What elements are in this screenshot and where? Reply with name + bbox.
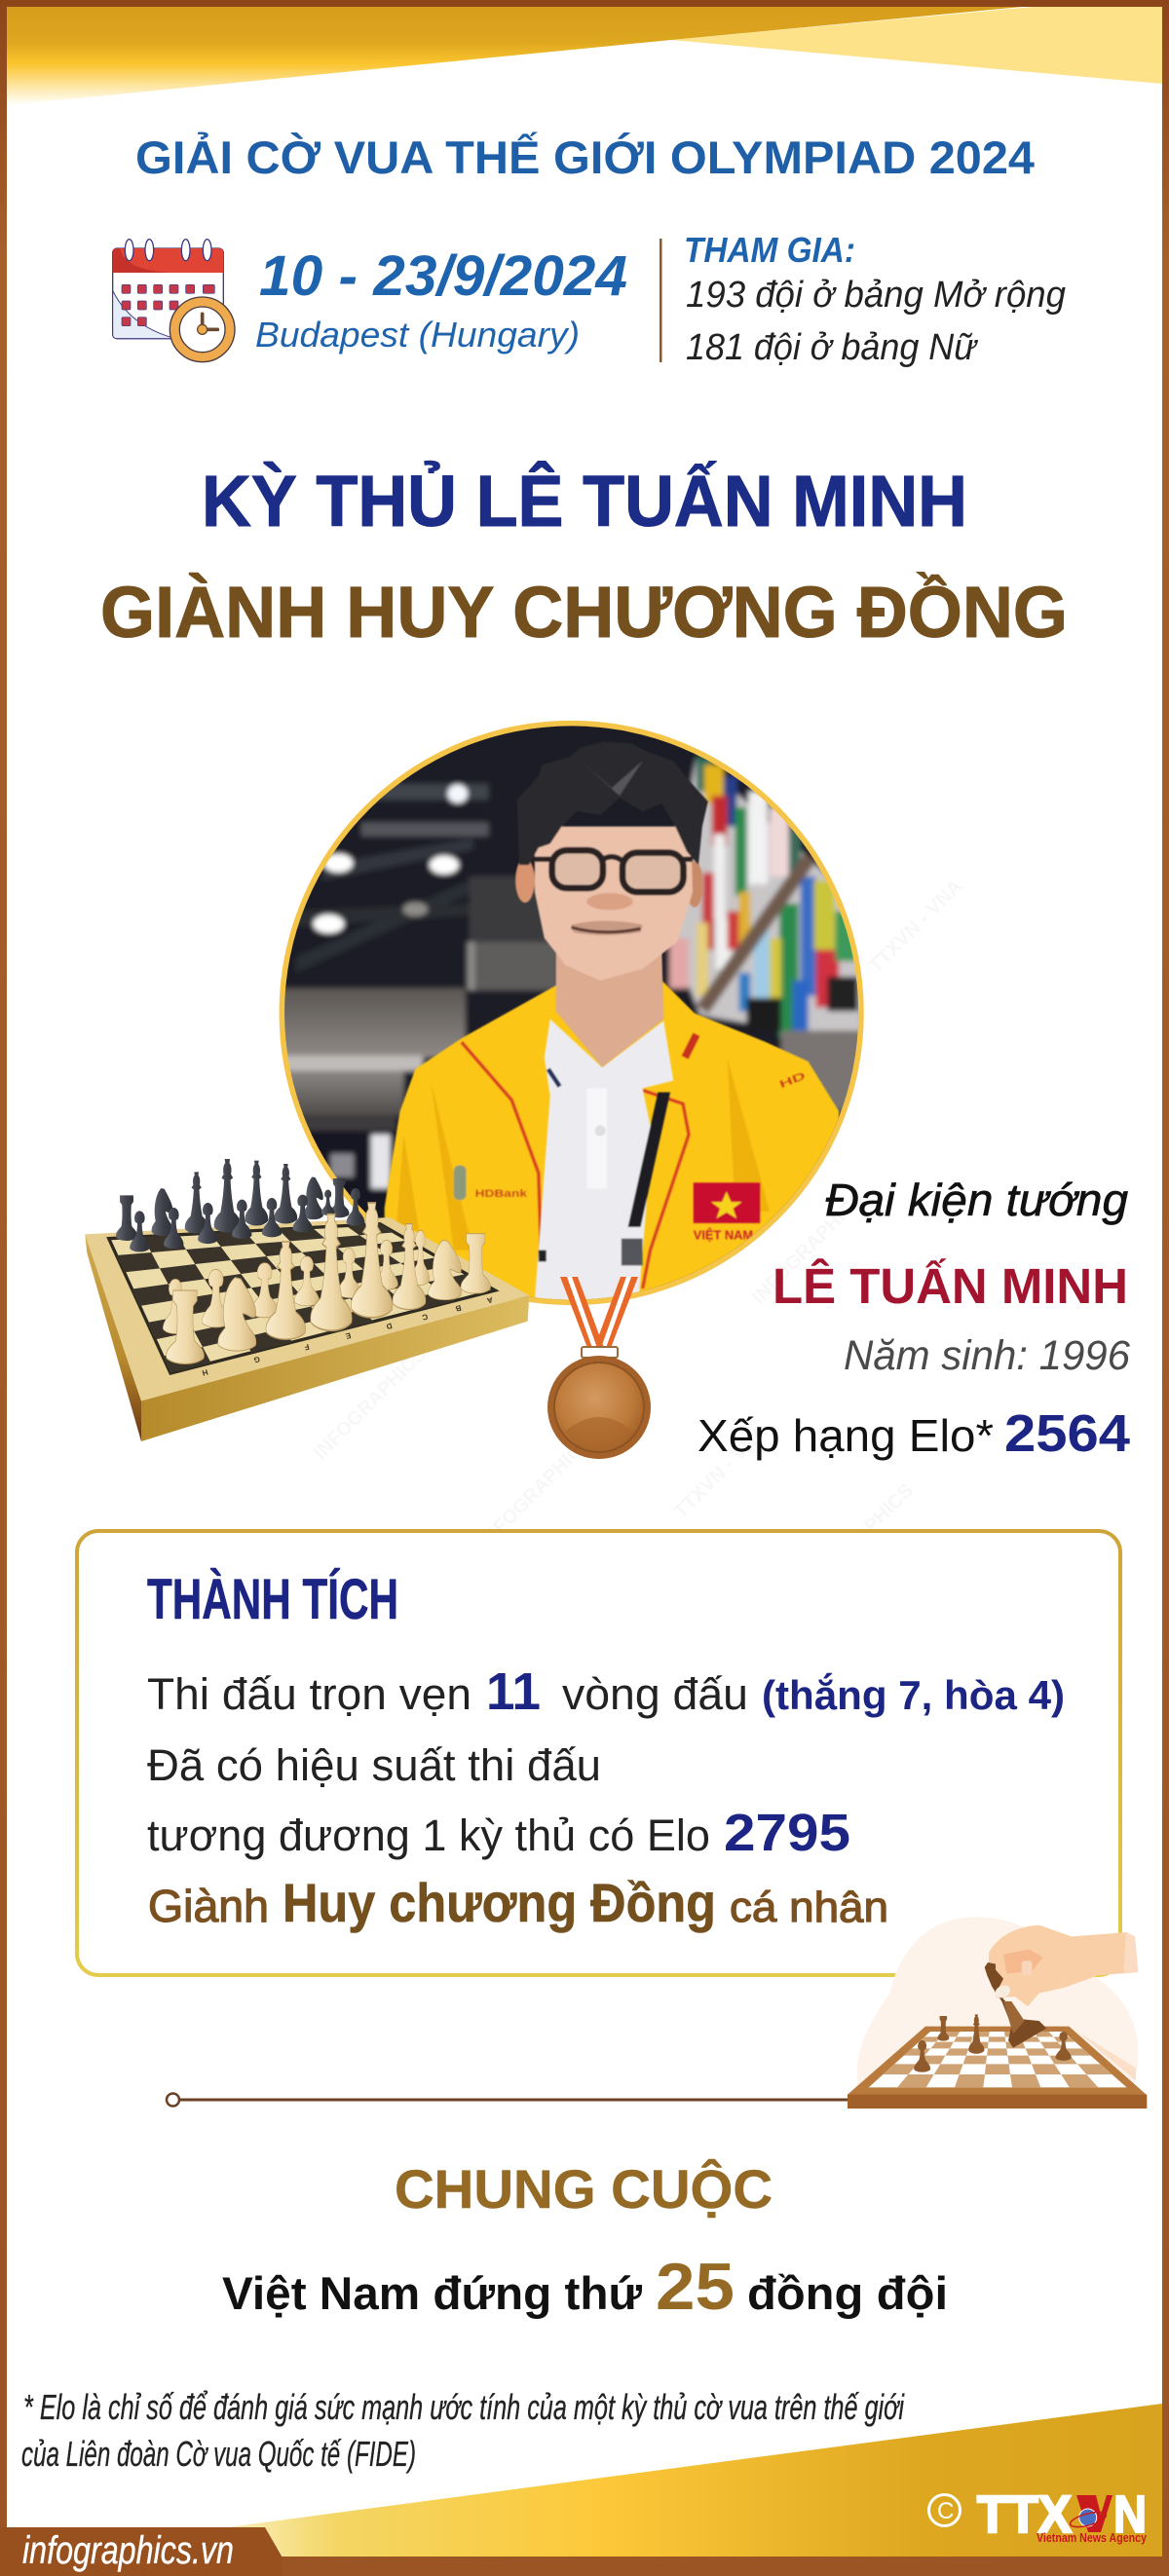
- chess board illustration: A: [486, 1295, 494, 1305]
- divider: [660, 239, 662, 362]
- achievement line 4: Giành: [148, 1881, 269, 1931]
- women section teams: 181 đội ở bảng Nữ: [686, 327, 979, 368]
- chess board illustration: D: [385, 1321, 393, 1331]
- achievement line 1: 11: [486, 1662, 541, 1721]
- conclusion heading: CHUNG CUỘC: [395, 2158, 773, 2220]
- elo label: Xếp hạng Elo*: [698, 1410, 994, 1461]
- footnote: của Liên đoàn Cờ vua Quốc tế (FIDE): [21, 2434, 416, 2474]
- achievement line 4: cá nhân: [730, 1884, 888, 1931]
- chess board illustration: B: [454, 1303, 462, 1313]
- text: INFOGRAPHICS: [475, 1432, 596, 1552]
- chess board illustration: F: [303, 1342, 310, 1352]
- achievement line 1: (thắng 7, hòa 4): [762, 1671, 1065, 1718]
- text: INFOGRAPHICS: [797, 1480, 918, 1601]
- icon: bronze medal: [547, 1277, 651, 1459]
- team result: 25: [656, 2250, 735, 2324]
- icon: hand moving chess piece: [848, 1917, 1147, 2109]
- footnote: [21, 2387, 905, 2474]
- text: INFOGRAPHICS: [310, 1344, 431, 1465]
- main title line 1: KỲ THỦ LÊ TUẤN MINH: [202, 461, 967, 541]
- jacket: [385, 981, 839, 1304]
- main title line 2: GIÀNH HUY CHƯƠNG ĐỒNG: [100, 572, 1068, 653]
- header: tournament title: GIẢI CỜ VUA THẾ GIỚI OLYMPIAD 2024: [135, 131, 1035, 183]
- bottom decorative banner: [227, 2404, 1162, 2557]
- chess board illustration: C: [421, 1312, 429, 1322]
- team result: đồng đội: [747, 2267, 948, 2319]
- achievement line 3: tương đương 1 kỳ thủ có Elo: [147, 1811, 710, 1860]
- chess board illustration: H: [201, 1367, 208, 1377]
- agency logo: N: [1113, 2485, 1147, 2544]
- achievement line 1: vòng đấu: [562, 1669, 748, 1719]
- player title: Đại kiện tướng: [825, 1175, 1128, 1225]
- player info: [698, 1175, 1130, 1463]
- participants heading: THAM GIA:: [684, 230, 855, 270]
- player name: LÊ TUẤN MINH: [773, 1257, 1128, 1314]
- top decorative banner: [7, 6, 1162, 105]
- agency logo: Vietnam News Agency: [1037, 2531, 1147, 2545]
- participants block: [684, 230, 1066, 368]
- black chess pieces: [116, 1159, 364, 1251]
- chess board illustration: G: [252, 1355, 261, 1364]
- chess board illustration: E: [344, 1330, 352, 1341]
- panel: achievements: [77, 1531, 1120, 1975]
- website tab: [0, 2527, 283, 2576]
- text: INFOGRAPHICS: [748, 1188, 869, 1309]
- icon: calendar and clock: [113, 240, 235, 362]
- event date: 10 - 23/9/2024: [259, 244, 627, 308]
- shirt and lanyard: [535, 1019, 673, 1300]
- agency logo: [929, 2485, 1147, 2545]
- event location: Budapest (Hungary): [255, 315, 580, 355]
- team result: [222, 2250, 948, 2324]
- white chess pieces: [163, 1203, 491, 1363]
- flag patch: VIỆT NAM: [694, 1228, 753, 1243]
- flags background: [665, 757, 862, 1111]
- open section teams: 193 đội ở bảng Mở rộng: [686, 275, 1066, 316]
- elo value: 2564: [1004, 1404, 1130, 1463]
- agency logo: TTX: [977, 2485, 1072, 2544]
- jacket: HD: [778, 1070, 808, 1091]
- chess board illustration: [85, 1159, 529, 1441]
- flag patch: [694, 1182, 760, 1243]
- birth year: Năm sinh: 1996: [844, 1332, 1130, 1379]
- achievement line 2: Đã có hiệu suất thi đấu: [147, 1740, 601, 1790]
- text: TTXVN - VNA: [865, 876, 966, 978]
- divider with dot: [167, 2094, 848, 2106]
- panel heading: THÀNH TÍCH: [147, 1568, 398, 1631]
- jacket: HDBank: [475, 1188, 528, 1200]
- text: TTXVN - VNA: [670, 1421, 772, 1523]
- achievement line 4: [148, 1872, 888, 1933]
- achievement line 4: Huy chương Đồng: [283, 1872, 716, 1933]
- agency logo: C: [937, 2498, 954, 2524]
- achievement line 3: 2795: [724, 1804, 850, 1862]
- website text: infographics.vn: [22, 2529, 234, 2572]
- head: [515, 742, 708, 1067]
- team result: Việt Nam đứng thứ: [222, 2267, 643, 2319]
- achievement line 1: [147, 1662, 1065, 1721]
- portrait photo illustration: [273, 711, 874, 1312]
- achievement line 1: Thi đấu trọn vẹn: [147, 1669, 471, 1719]
- achievement line 3: [147, 1804, 850, 1862]
